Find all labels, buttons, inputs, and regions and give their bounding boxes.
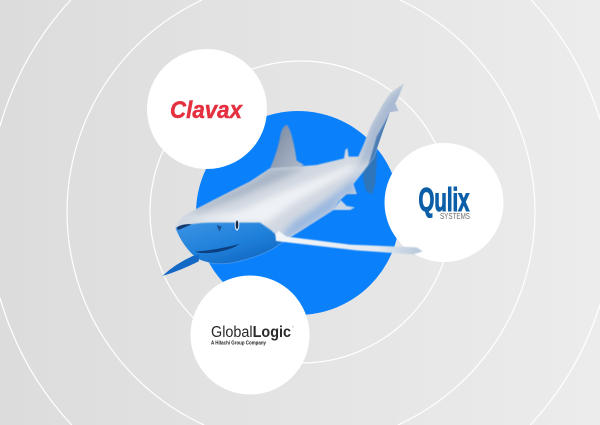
shark nostril <box>217 225 222 232</box>
shark barbel <box>162 255 199 276</box>
shark small fin <box>333 200 355 210</box>
shark tail lower lobe <box>363 152 377 195</box>
shark tail tone <box>360 82 405 167</box>
logo: GlobalLogic: GlobalLogic <box>211 324 291 341</box>
logo: Qulix Systems <box>384 143 504 262</box>
shark rear fin <box>342 183 357 195</box>
shark <box>162 82 423 276</box>
shark back shadow <box>189 167 307 213</box>
logo: GlobalLogic: ° <box>292 325 294 330</box>
shark snout edge <box>177 224 192 230</box>
shark pectoral fin <box>275 231 423 254</box>
shark flank highlight <box>187 165 357 223</box>
shark blue underside <box>176 222 283 264</box>
logo: GlobalLogic <box>190 276 310 394</box>
shark belly tone <box>281 173 360 237</box>
shark eye <box>235 218 239 231</box>
logo: Qulix Systems: SYSTEMS <box>440 212 470 221</box>
logo: Clavax: Clavax <box>170 97 243 124</box>
logo: Clavax <box>147 49 267 169</box>
shark mouth <box>195 244 239 253</box>
logo: Qulix Systems: Qulix <box>418 181 470 218</box>
shark shading <box>173 82 405 270</box>
shark tail dark edge <box>368 112 391 165</box>
shark dorsal fin <box>270 125 304 172</box>
shark body <box>175 83 404 264</box>
blue circle <box>196 111 400 315</box>
logo: GlobalLogic: A Hitachi Group Company <box>211 340 266 346</box>
